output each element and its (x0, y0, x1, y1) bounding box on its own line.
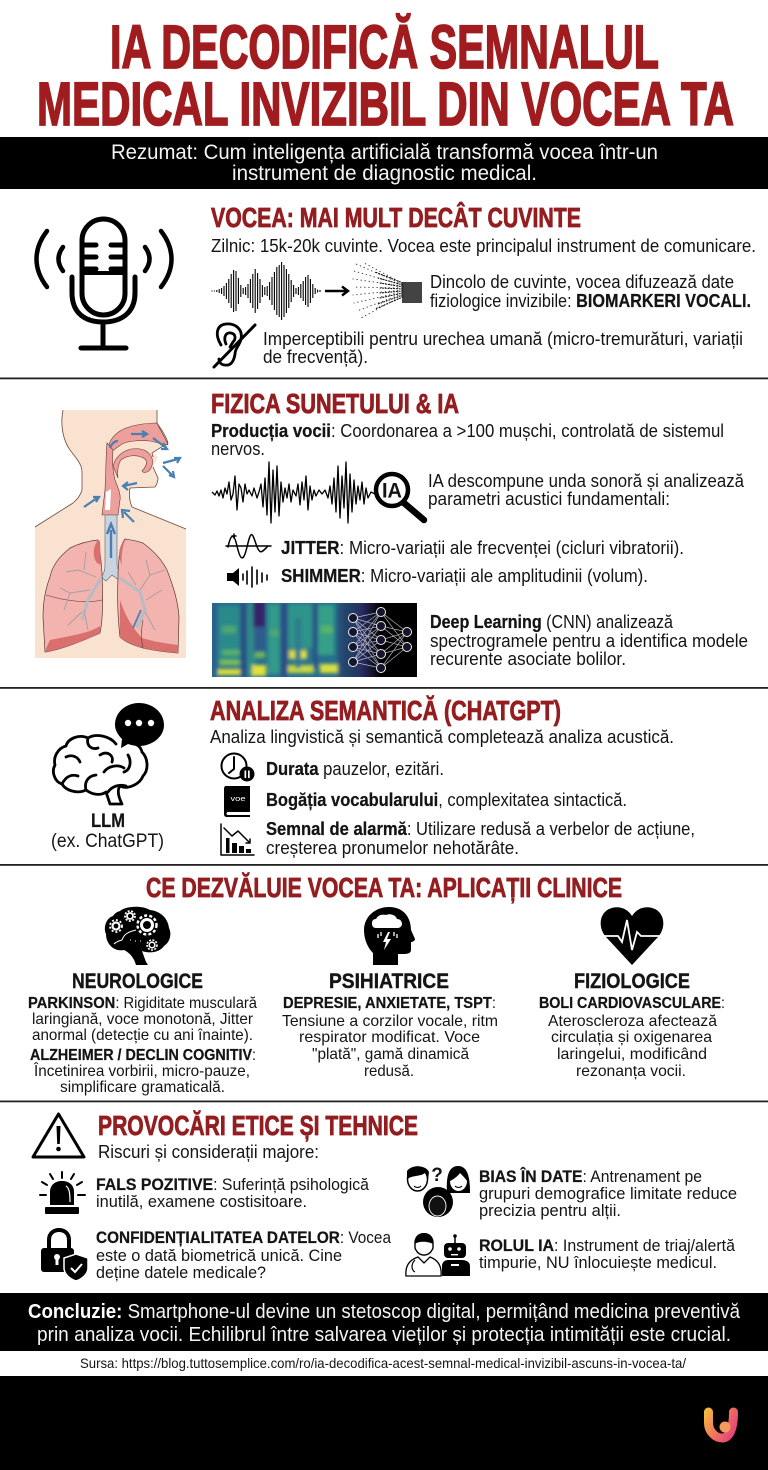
deep learning text (430, 612, 748, 669)
icon: voice waveform (212, 262, 320, 320)
conclusion banner: Concluzie: Smartphone-ul devine un stetoscop digital, permițând medicina preventivă (28, 1301, 741, 1323)
rolul IA text (479, 1236, 735, 1272)
heading: psihiatrice: PSIHIATRICE (329, 969, 449, 993)
icon: shimmer (227, 567, 267, 587)
confidentialitate text: deține datele medicale? (96, 1263, 266, 1282)
alarm text (266, 819, 695, 858)
icon: declining chart (221, 824, 254, 855)
voice production text: Producția vocii: Coordonarea a >100 mușchi, controlată de sistemul (211, 421, 724, 441)
fals pozitive text: FALS POZITIVE: Suferință psihologică (96, 1175, 369, 1194)
bias text: precizia pentru alții. (479, 1201, 621, 1220)
voice production text (211, 421, 724, 459)
summary banner: instrument de diagnostic medical. (232, 162, 537, 185)
text: neurologice: anormal (detecție cu ani înainte). (32, 1027, 253, 1044)
text: fiziologice: BOLI CARDIOVASCULARE: (539, 995, 725, 1012)
text: psihiatrice: respirator modificat. Voce (299, 1029, 480, 1046)
icon: lock with shield (41, 1230, 88, 1281)
icon: particles (353, 263, 422, 318)
column: fiziologice (539, 907, 725, 1080)
rolul IA text: timpurie, NU înlocuiește medicul. (479, 1253, 717, 1272)
icon: microphone (36, 219, 172, 348)
icon: brain with speech bubble (53, 703, 164, 804)
icon: magnifier IA: IA (382, 480, 402, 502)
bias text: grupuri demografice limitate reduce (479, 1184, 737, 1203)
jitter text: JITTER: Micro-variații ale frecvenței (cicluri vibratorii). (281, 538, 684, 558)
voice production text: nervos. (211, 439, 265, 459)
chart: sound wave (212, 462, 375, 523)
imperceptible text (263, 329, 743, 367)
arrow (325, 286, 348, 296)
column: psihiatrice (282, 907, 498, 1080)
panel: fizica sunetului (35, 388, 748, 677)
icon: doctor and robot (406, 1233, 470, 1276)
chart: spectrogram with neural network (212, 601, 417, 677)
LLM label (51, 811, 164, 852)
illustration: vocal tract and lungs (35, 410, 186, 658)
intro text: Analiza lingvistică și semantică completează analiza acustică. (210, 727, 674, 747)
text: psihiatrice: "plată", gamă dinamică (312, 1046, 469, 1063)
heading: FIZICA SUNETULUI & IA (211, 388, 459, 419)
icon: book: voe (230, 794, 246, 803)
heading: fiziologice: FIZIOLOGICE (574, 969, 690, 993)
icon: head with storm cloud (364, 907, 415, 965)
text: neurologice (28, 995, 257, 1096)
biomarkers text: fiziologice invizibile: BIOMARKERI VOCALI. (430, 291, 751, 311)
imperceptible text: Imperceptibili pentru urechea umană (micro-tremurături, variații (263, 329, 743, 349)
panel: vocea (36, 202, 756, 367)
alarm text: Semnal de alarmă: Utilizare redusă a verbelor de acțiune, (266, 819, 695, 839)
text: neurologice: simplificare gramaticală. (60, 1079, 225, 1096)
heading: neurologice: NEUROLOGICE (72, 969, 203, 993)
heading: CE DEZVĂLUIE VOCEA TA: APLICAȚII CLINICE (146, 872, 622, 903)
panel: provocari etice (33, 1110, 737, 1282)
alarm text: creșterea pronumelor nehotărâte. (266, 838, 519, 858)
column: neurologice (28, 907, 257, 1096)
text: psihiatrice: DEPRESIE, ANXIETATE, TSPT: (283, 995, 496, 1012)
icon: jitter (226, 534, 271, 558)
summary banner (0, 137, 768, 189)
icon: diverse faces: ? (431, 1165, 443, 1186)
acoustic text: parametri acustici fundamentali: (428, 489, 670, 509)
fals pozitive text (96, 1175, 369, 1211)
acoustic text (428, 471, 745, 509)
deep learning text: spectrogramele pentru a identifica modele (430, 631, 748, 651)
intro text: Riscuri și considerații majore: (98, 1142, 319, 1162)
deep learning text: recurente asociate bolilor. (430, 649, 626, 669)
bogatia text: Bogăția vocabularului, complexitatea sintactică. (266, 790, 627, 810)
acoustic text: IA descompune unda sonoră și analizează (428, 471, 745, 491)
icon: logo (708, 1412, 734, 1438)
heading: VOCEA: MAI MULT DECÂT CUVINTE (211, 202, 581, 233)
bias text (479, 1167, 737, 1220)
confidentialitate text: CONFIDENȚIALITATEA DATELOR: Vocea (96, 1228, 391, 1247)
LLM label: LLM (91, 811, 125, 832)
summary banner: Rezumat: Cum inteligența artificială transformă vocea într-un (111, 141, 658, 164)
heading: PROVOCĂRI ETICE ȘI TEHNICE (98, 1110, 418, 1141)
icon: warning triangle (33, 1114, 84, 1157)
icon: alarm light (40, 1172, 85, 1214)
text: neurologice: PARKINSON: Rigiditate musculară (28, 995, 257, 1012)
shimmer text: SHIMMER: Micro-variații ale amplitudinii (volum). (281, 566, 648, 586)
text: psihiatrice (282, 995, 498, 1080)
text: fiziologice: Ateroscleroza afectează (548, 1013, 717, 1030)
LLM label: (ex. ChatGPT) (51, 831, 164, 852)
rolul IA text: ROLUL IA: Instrument de triaj/alertă (479, 1236, 735, 1255)
text: psihiatrice: redusă. (364, 1063, 414, 1080)
text: neurologice: Încetinirea vorbirii, micro-pauze, (33, 1061, 250, 1080)
panel: analiza semantica (51, 695, 695, 858)
text: fiziologice (539, 995, 725, 1080)
imperceptible text: de frecvență). (263, 347, 368, 367)
bias text: BIAS ÎN DATE: Antrenament pe (479, 1167, 702, 1186)
footer black band (0, 1376, 768, 1470)
conclusion banner (0, 1293, 768, 1351)
icon: heart with pulse (601, 907, 663, 965)
durata text: Durata pauzelor, ezitări. (266, 759, 444, 779)
nasal cavity (108, 423, 168, 454)
deep learning text: Deep Learning (CNN) analizează (430, 612, 674, 632)
text: fiziologice: circulația și oxigenarea (551, 1029, 712, 1046)
confidentialitate text (96, 1228, 391, 1282)
icon: clock pause (222, 754, 254, 782)
biomarkers text (430, 272, 751, 311)
title (37, 13, 734, 138)
panel: aplicatii clinice (28, 872, 725, 1096)
confidentialitate text: este o dată biometrică unică. Cine (96, 1246, 342, 1265)
conclusion banner: prin analiza vocii. Echilibrul între salvarea vieților și protecția intimității este crucial. (37, 1324, 731, 1346)
text: neurologice: laringiană, voce monotonă, Jitter (32, 1011, 254, 1028)
icon: diverse faces (407, 1165, 470, 1217)
icon: book (224, 786, 250, 817)
text: fiziologice: laringelui, modificând (557, 1046, 707, 1063)
icon: magnifier IA (376, 474, 424, 520)
icon: brain with gears (105, 907, 170, 965)
heading: ANALIZA SEMANTICĂ (CHATGPT) (210, 695, 561, 726)
text: neurologice: ALZHEIMER / DECLIN COGNITIV: (30, 1047, 256, 1064)
source line: Sursa: https://blog.tuttosemplice.com/ro/ia-decodifica-acest-semnal-medical-invizibil-ascuns-in-vocea-ta/ (80, 1355, 686, 1371)
fals pozitive text: inutilă, examene costisitoare. (96, 1192, 307, 1211)
icon: crossed ear (214, 324, 255, 367)
text: fiziologice: rezonanța vocii. (576, 1063, 686, 1080)
text: psihiatrice: Tensiune a corzilor vocale, ritm (282, 1013, 498, 1030)
biomarkers text: Dincolo de cuvinte, vocea difuzează date (430, 272, 734, 292)
